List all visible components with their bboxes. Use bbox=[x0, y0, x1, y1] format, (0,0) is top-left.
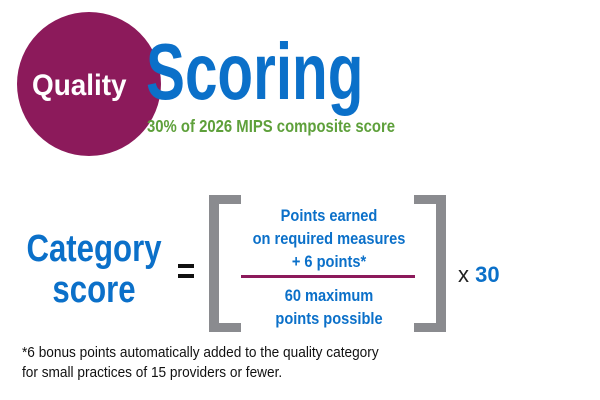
numerator: on required measures bbox=[253, 229, 405, 248]
label: category score bbox=[26, 228, 162, 311]
footnote bbox=[22, 344, 379, 381]
left bracket bbox=[209, 195, 241, 332]
numerator bbox=[253, 206, 405, 271]
badge text: Quality bbox=[32, 69, 127, 102]
right bracket bbox=[414, 195, 446, 332]
multiplier: x 30 bbox=[458, 262, 500, 287]
badge: quality circle bbox=[17, 12, 161, 156]
equals sign bbox=[178, 264, 194, 278]
numerator: Points earned bbox=[281, 206, 377, 225]
fraction line bbox=[241, 275, 415, 278]
footnote: *6 bonus points automatically added to the quality category bbox=[22, 344, 379, 361]
label: category score: score bbox=[52, 269, 136, 311]
subtitle: 30% of 2026 MIPS composite score bbox=[147, 116, 395, 136]
label: category score: Category bbox=[26, 228, 162, 270]
title: Scoring bbox=[146, 27, 363, 116]
numerator: + 6 points* bbox=[292, 252, 366, 271]
denominator: points possible bbox=[275, 309, 383, 328]
denominator: 60 maximum bbox=[285, 286, 373, 305]
footnote: for small practices of 15 providers or fewer. bbox=[22, 364, 282, 381]
denominator bbox=[275, 286, 383, 328]
